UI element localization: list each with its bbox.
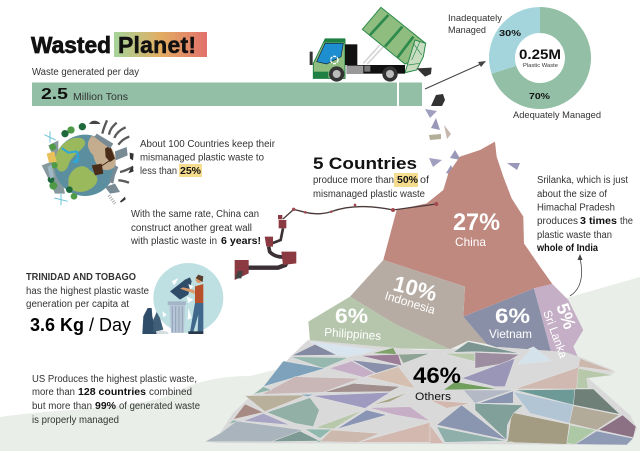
label: indonesia: 10% [391,271,440,306]
mountain: vietnam [463,288,553,360]
background hill [0,277,640,451]
label: china: 27% [453,209,500,236]
arrow: sri lanka note [570,254,582,296]
label: china: China [455,235,486,249]
label: sri lanka: 5% [552,301,580,332]
label: vietnam: 6% [495,305,530,328]
text: us: combined [149,387,192,398]
text: 5 countries [313,154,429,200]
text: us: US Produces the highest plastic waste, [32,374,197,385]
text: us [32,374,200,426]
text: sri lanka note: plastic waste than [537,230,612,241]
text: trinidad: TRINIDAD AND TOBAGO [26,272,136,283]
text: sri lanka note: about the size of [537,189,607,200]
icon: man with trash [142,263,223,334]
title: Planet! [118,32,196,58]
donut chart: 70% [529,91,551,101]
icon: garbage truck [310,7,432,82]
waste per day label: Waste generated per day [32,67,139,78]
icon: planet earth [42,120,134,205]
label: inadequately managed: Inadequately [448,13,502,24]
text: us: of generated waste [119,401,200,412]
mountain: indonesia [350,260,487,349]
label: china [453,209,500,249]
title: Wasted [31,32,111,58]
text: 100 countries: 25% [180,166,201,177]
text: trinidad: generation per capita at [26,299,129,310]
label: philippines: 6% [335,305,368,328]
text: us: 128 countries [78,387,146,398]
donut chart: Plastic Waste [523,63,558,69]
text: us: is properly managed [32,415,119,426]
label: sri lanka [540,301,580,360]
text: us: more than [32,387,75,398]
text: trinidad: has the highest plastic waste [26,286,149,297]
label: philippines [324,305,382,343]
icon: falling bag and fragments [425,94,520,176]
text: great wall: with plastic waste in [130,236,217,247]
waste bar: Million Tons [73,91,128,103]
label: others: Others [415,391,452,403]
text: 100 countries [140,139,276,177]
waste bar [32,82,422,106]
label: others: 46% [413,363,461,388]
text: 5 countries: produce more than [313,175,394,186]
label: indonesia [383,271,440,317]
text: sri lanka note: 3 times [580,216,617,227]
arrow to donut [425,61,486,89]
donut chart: 0.25M [519,47,561,62]
label: indonesia: Indonesia [383,288,437,317]
text: sri lanka note [536,175,633,254]
label: adequately managed: Adequately Managed [513,110,601,121]
donut chart [489,7,591,109]
text: us: but more than [32,401,92,412]
text: 5 countries: mismanaged plastic waste [313,189,425,200]
text: sri lanka note: produces [537,216,578,227]
text: great wall: With the same rate, China can [131,209,259,220]
text: 5 countries: 5 Countries [313,154,417,173]
mountain: philippines [308,297,450,352]
label: sri lanka: Sri Lanka [540,308,571,360]
text: sri lanka note: whole of India [536,243,598,254]
label: vietnam [489,305,532,341]
mountain fragments left [205,341,430,442]
donut chart: 30% [499,28,522,38]
label: inadequately managed [448,13,502,36]
text: great wall [130,209,261,247]
text: 5 countries: 50% [397,175,418,186]
mountain: others base [206,340,637,445]
mountain: sri lanka [534,284,583,362]
text: great wall: construct another great wall [131,223,252,234]
text: great wall: 6 years! [221,236,261,247]
title [31,32,207,58]
text: 100 countries: less than [140,166,177,177]
text: sri lanka note: Himachal Pradesh [537,202,615,214]
text: trinidad [26,272,149,335]
text: trinidad: 3.6 Kg / Day [30,315,131,335]
icon: great wall [235,202,438,280]
label: vietnam: Vietnam [489,327,532,341]
text: 5 countries: of [420,175,429,186]
text: 100 countries: About 100 Countries keep their [140,139,276,150]
text: sri lanka note: the [620,216,633,227]
mountain: china [383,142,552,317]
label: inadequately managed: Managed [448,25,486,36]
text: sri lanka note: Srilanka, which is just [537,175,628,186]
waste bar: 2.5 [41,86,68,103]
text: us: 99% [95,401,116,412]
label: philippines: Philippines [324,325,382,343]
mountain fragments right [430,342,636,445]
text: 100 countries: mismanaged plastic waste to [140,152,264,164]
label: others [413,363,461,403]
